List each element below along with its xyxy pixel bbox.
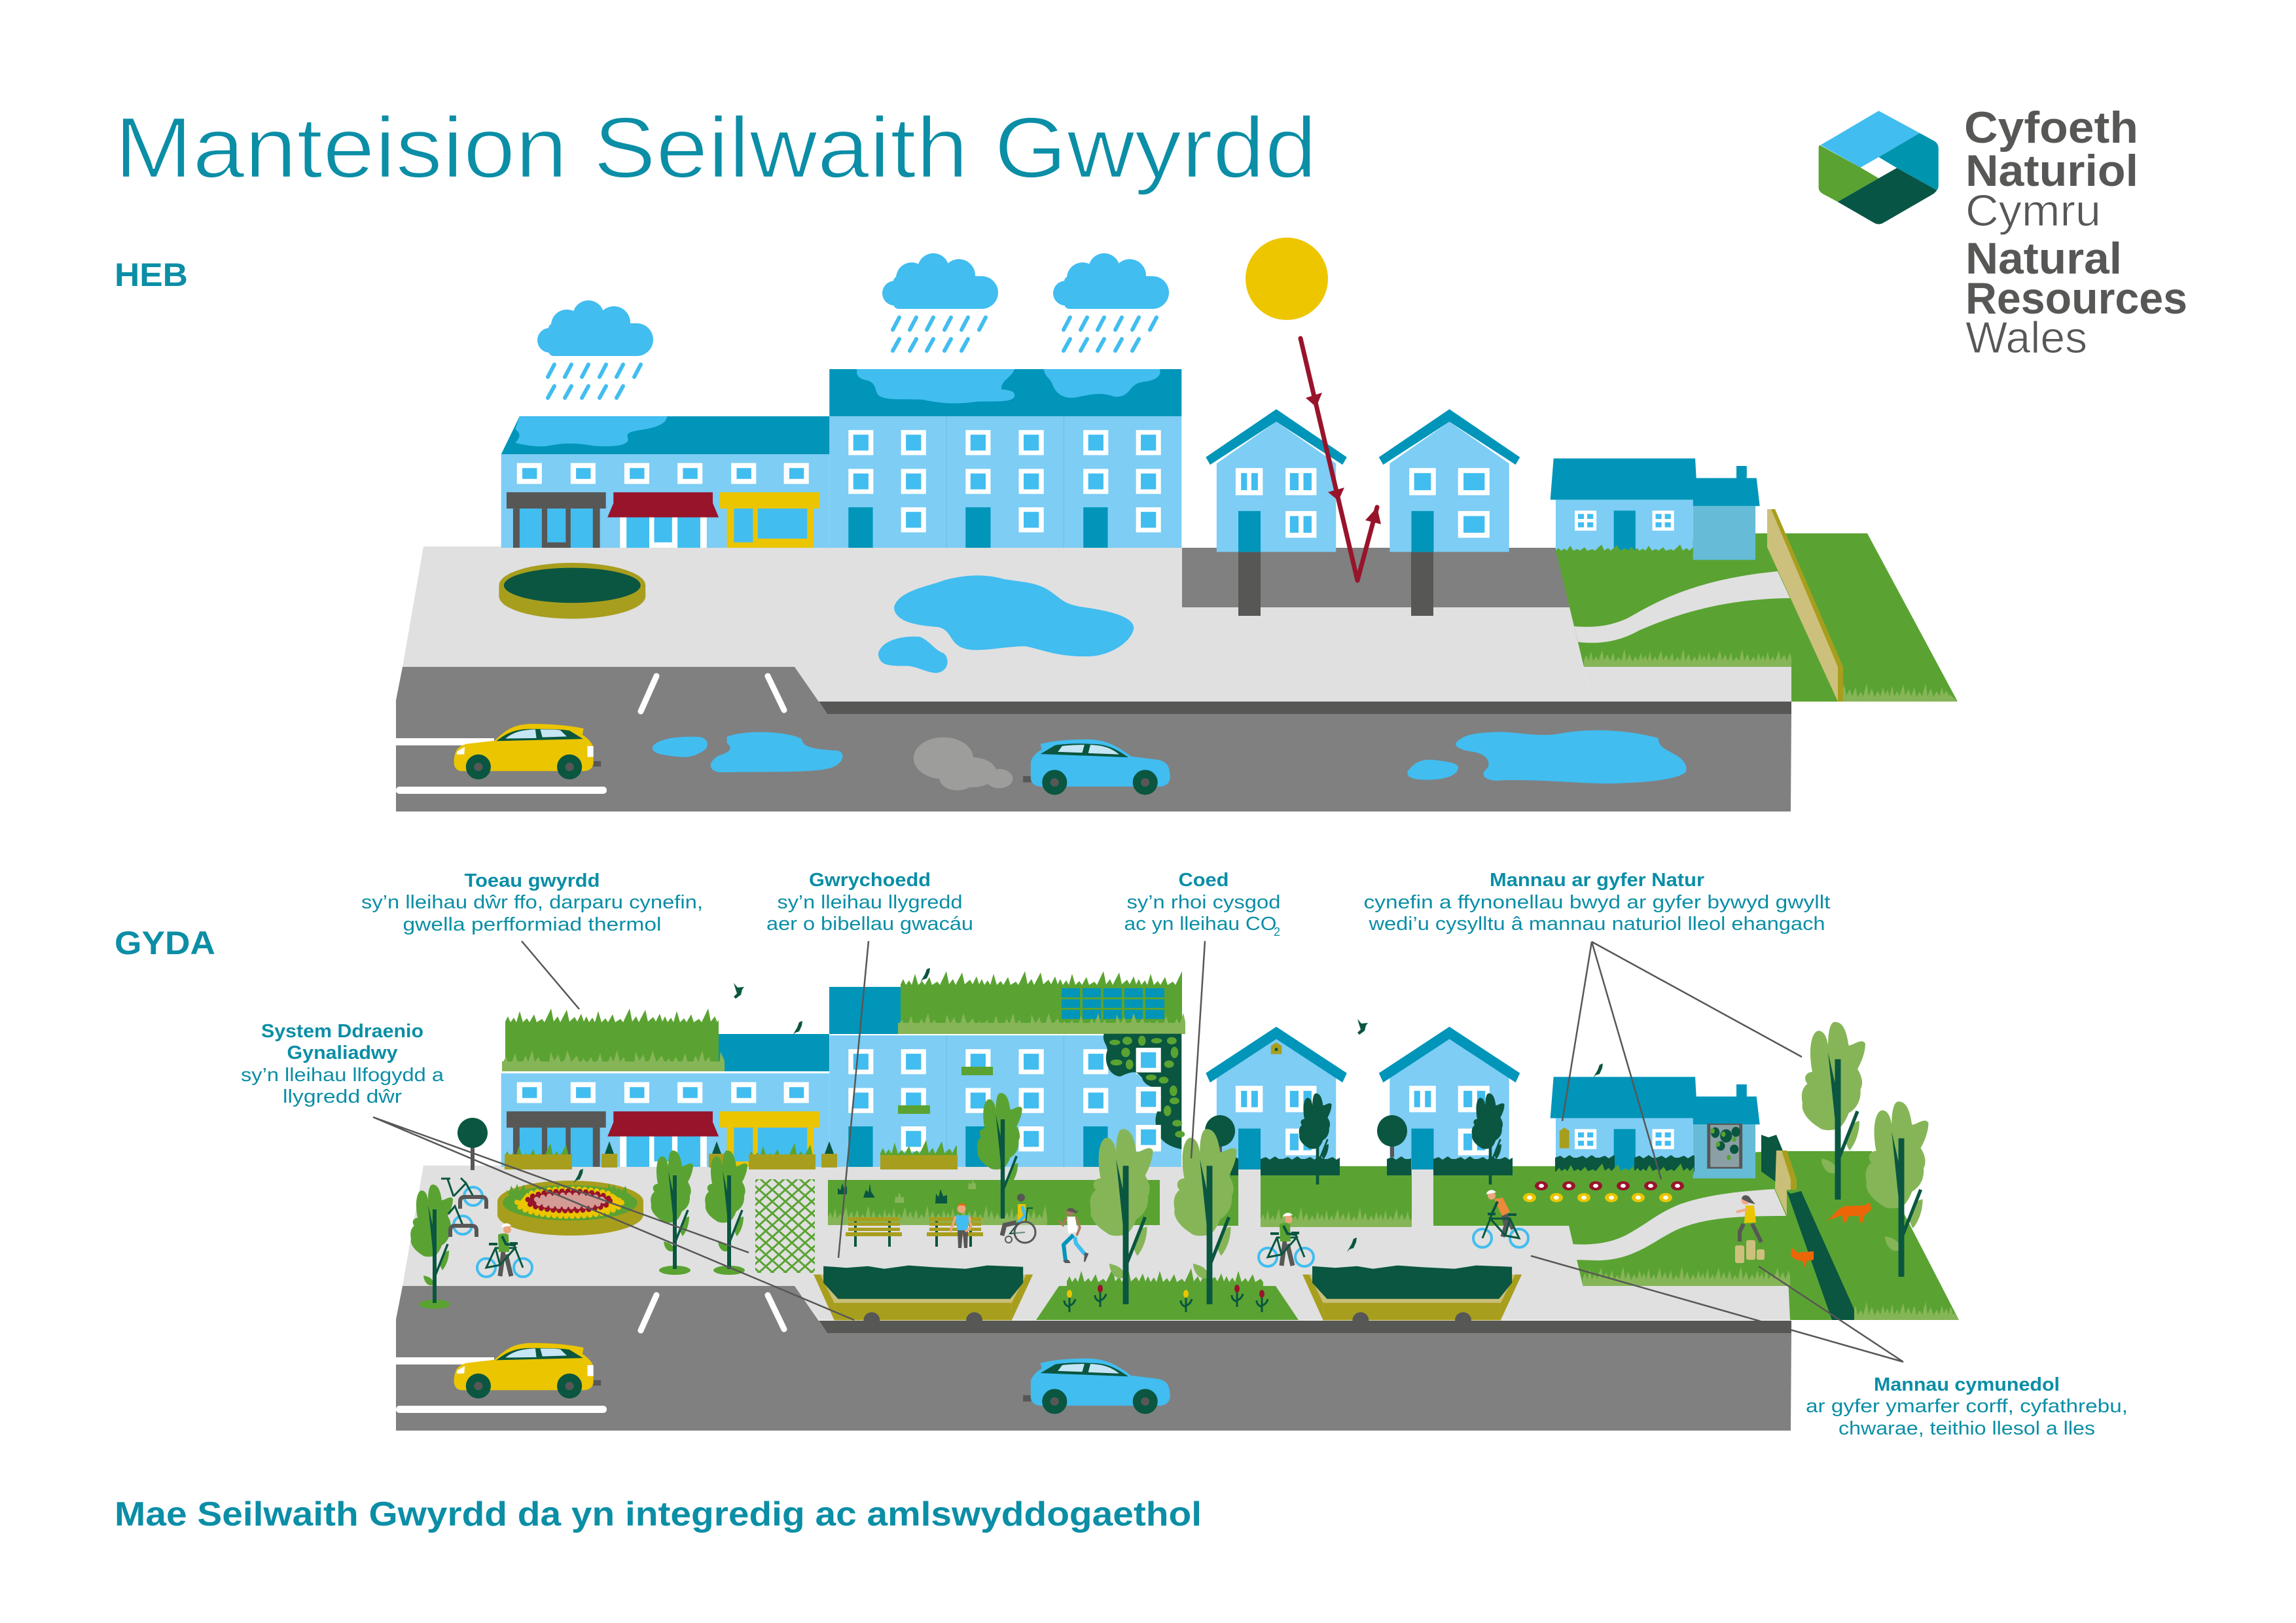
foxes xyxy=(1791,1202,1871,1268)
label: Coed: 2 xyxy=(1274,925,1280,938)
logo text: Cyfoeth xyxy=(1964,103,2138,152)
child on stepping stumps xyxy=(1735,1195,1765,1263)
terrace buildings xyxy=(501,416,1181,548)
label: Gwrychoedd xyxy=(766,870,973,935)
label: Gwrychoedd: Gwrychoedd xyxy=(809,870,931,891)
label: System Ddraenio Gynaliadwy: sy’n lleihau llfogydd a xyxy=(241,1065,444,1086)
flower beds xyxy=(1523,1181,1684,1202)
label: System Ddraenio Gynaliadwy: System Ddraenio xyxy=(261,1021,423,1042)
label: Coed xyxy=(1124,870,1280,938)
house paths xyxy=(1238,1169,1433,1226)
scene: without green infrastructure xyxy=(396,238,1958,812)
footpath xyxy=(1573,1189,1786,1260)
street trees xyxy=(410,1093,1022,1309)
garden and field xyxy=(1556,533,1958,702)
central green bed xyxy=(1036,1286,1299,1320)
bed grass and flowers xyxy=(1064,1268,1268,1312)
front lawns xyxy=(1217,1151,1959,1320)
label: System Ddraenio Gynaliadwy xyxy=(241,1021,444,1107)
label: Mannau cymunedol: chwarae, teithio llesol a lles xyxy=(1839,1418,2095,1439)
logo text: Cymru xyxy=(1965,186,2101,236)
cottage details: bird box, trellis xyxy=(1560,1124,1742,1169)
hedges xyxy=(1230,1154,1695,1175)
cottage garden grass xyxy=(1556,1164,1694,1174)
birds xyxy=(573,968,1603,1252)
label: Coed: ac yn lleihau CO xyxy=(1124,914,1276,935)
logo text xyxy=(1964,103,2187,363)
lawn grass strips xyxy=(1261,1207,1959,1320)
trellis xyxy=(755,1179,815,1273)
label: System Ddraenio Gynaliadwy: Gynaliadwy xyxy=(287,1043,398,1063)
scene: with green infrastructure xyxy=(396,968,1959,1431)
rain clouds xyxy=(537,253,1169,398)
houses xyxy=(1206,1027,1520,1169)
label: Toeau gwyrdd xyxy=(361,870,703,935)
label: Toeau gwyrdd: sy’n lleihau dŵr ffo, darparu cynefin, xyxy=(361,892,703,913)
road with cars xyxy=(396,667,1791,812)
green wall ivy xyxy=(1103,1034,1185,1150)
logo: Natural Resources Wales xyxy=(1819,103,2187,363)
cottage xyxy=(1551,1077,1760,1179)
label: Mannau ar gyfer Natur: Mannau ar gyfer Natur xyxy=(1490,870,1704,891)
cottage xyxy=(1551,459,1760,560)
cottage grass xyxy=(1556,544,1693,554)
label: Mannau ar gyfer Natur: cynefin a ffynonellau bwyd ar gyfer bywyd gwyllt xyxy=(1364,892,1830,913)
heading: HEB: HEB xyxy=(115,257,188,293)
hedge and fence xyxy=(1761,1135,1854,1320)
label: Mannau ar gyfer Natur xyxy=(1364,870,1830,935)
green roof high xyxy=(898,971,1185,1034)
pavement xyxy=(403,546,1592,702)
teal roofs xyxy=(717,987,905,1071)
raised lawn xyxy=(828,1179,1160,1225)
benches xyxy=(846,1217,983,1247)
label: Gwrychoedd: aer o bibellau gwacáu xyxy=(766,914,973,935)
label: Coed: sy’n rhoi cysgod xyxy=(1127,892,1280,913)
parked bikes xyxy=(441,1178,486,1237)
label: Mannau cymunedol xyxy=(1806,1374,2128,1439)
window boxes xyxy=(898,1067,993,1114)
lollipop trees xyxy=(457,1115,1407,1170)
green roof low xyxy=(502,1008,725,1071)
heading: GYDA: GYDA xyxy=(115,925,215,961)
label: Mannau cymunedol: ar gyfer ymarfer corff, cyfathrebu, xyxy=(1806,1396,2128,1417)
sun xyxy=(1246,238,1328,320)
title: Manteision Seilwaith Gwyrdd xyxy=(115,99,1317,196)
water puddles xyxy=(653,575,1134,772)
seated person xyxy=(950,1204,971,1248)
road puddles right xyxy=(1407,730,1687,783)
label: Coed: Coed xyxy=(1178,870,1229,891)
large trees xyxy=(1090,1022,1928,1304)
logo hexagon icon xyxy=(1819,111,1939,224)
wheelchair user xyxy=(1002,1194,1035,1243)
pavement xyxy=(403,1166,1790,1320)
driveways xyxy=(1182,548,1570,616)
label: Mannau ar gyfer Natur: wedi’u cysylltu â mannau naturiol lleol ehangach xyxy=(1368,914,1825,935)
label: Toeau gwyrdd: gwella perfformiad thermol xyxy=(403,914,661,935)
cyclist in orange xyxy=(1473,1190,1528,1247)
dark garden trees xyxy=(1299,1094,1505,1185)
cyclists xyxy=(477,1190,1528,1277)
label: System Ddraenio Gynaliadwy: llygredd dŵr xyxy=(283,1086,402,1107)
footer statement: Mae Seilwaith Gwyrdd da yn integredig ac amlswyddogaethol xyxy=(115,1495,1202,1533)
logo text: Naturiol xyxy=(1965,146,2138,196)
runner xyxy=(1058,1208,1088,1262)
houses xyxy=(1206,409,1520,552)
label: Mannau cymunedol: Mannau cymunedol xyxy=(1874,1374,2060,1395)
fence xyxy=(1767,509,1843,702)
logo text: Natural xyxy=(1965,234,2122,283)
callout lines xyxy=(373,941,1903,1362)
flat roofs with standing water xyxy=(501,369,1181,454)
solar panels xyxy=(1062,988,1164,1019)
road with cars xyxy=(396,1286,1791,1431)
heat arrow xyxy=(1300,338,1381,580)
logo text: Wales xyxy=(1965,313,2087,363)
label: Toeau gwyrdd: Toeau gwyrdd xyxy=(465,870,600,891)
shop front planters xyxy=(505,1140,958,1169)
label: Gwrychoedd: sy’n lleihau llygredd xyxy=(778,892,962,913)
raised circular flower bed xyxy=(497,1181,643,1236)
rain gardens xyxy=(814,1266,1522,1329)
exhaust smoke xyxy=(914,738,1013,791)
empty tree planter ring xyxy=(499,563,645,618)
terrace buildings xyxy=(501,1035,1181,1167)
logo text: Resources xyxy=(1965,274,2187,323)
